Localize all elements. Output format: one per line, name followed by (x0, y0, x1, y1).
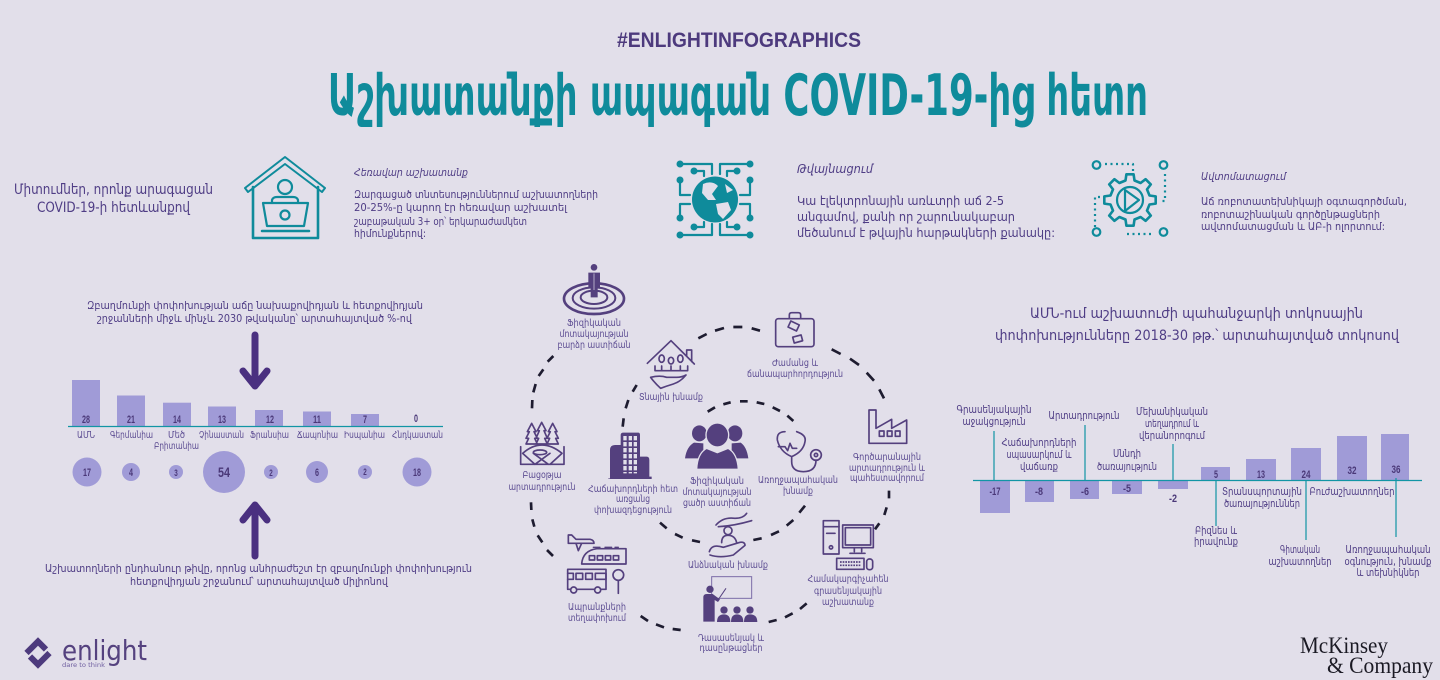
diverging bar chart: US labor demand (956, 404, 1432, 579)
logo: McKinsey & Company: & Company (1327, 653, 1433, 678)
text block: digitization: մեծանում է թվային հարթակների քանակը: (797, 225, 1055, 240)
text block: remote work: հիմունքներով: (354, 227, 426, 240)
diverging bar chart: US labor demand: Գրասենյակային (956, 404, 1032, 416)
text block: automation: ավտոմատացման և ԱԲ-ի ոլորտում: (1201, 220, 1385, 233)
bar chart: occupation change by country (68, 380, 443, 452)
bar chart: occupation change by country: 7 (363, 414, 367, 426)
diagram labels: Ֆիզիկական (690, 476, 744, 487)
diverging bar chart: US labor demand: սպասարկում և (1006, 449, 1072, 461)
circular work-arena diagram (508, 264, 925, 654)
bubble row: workers needing change, millions: 54 (218, 464, 230, 480)
diagram labels: Ապրանքների (568, 602, 626, 613)
text block: digitization: Կա էլեկտրոնային առևտրի աճ 2-5 (797, 193, 1004, 208)
diagram labels: գրասենյակային (814, 586, 882, 597)
icon: office building (608, 433, 652, 479)
icon: outdoor production (521, 422, 564, 464)
diagram labels: աշխատանք (822, 597, 874, 608)
diverging bar chart: US labor demand: -6 (1081, 486, 1089, 498)
diverging bar chart: US labor demand: 36 (1392, 464, 1400, 476)
diverging bar chart: US labor demand: 5 (1214, 469, 1218, 481)
text block: remote work (354, 166, 598, 240)
bubble row: workers needing change, millions: 17 (83, 467, 91, 479)
bar chart: occupation change by country: Մեծ (168, 430, 185, 441)
text block: remote work: 20-25%-ը կարող էր հեռավար աշխատել (354, 201, 568, 214)
diverging bar chart: US labor demand: Արտադրություն (1048, 410, 1120, 422)
bar chart: occupation change by country: Իսպանիա (344, 430, 385, 441)
diagram labels: Ֆիզիկական (567, 318, 621, 329)
diverging bar chart: US labor demand: Մեխանիկական (1136, 406, 1208, 418)
diverging bar chart: US labor demand: Հաճախորդների (1002, 437, 1076, 449)
bubble row: workers needing change, millions: 2 (269, 468, 273, 478)
diverging bar chart: US labor demand: 13 (1257, 469, 1265, 481)
diagram labels: ցածր աստիճան (683, 498, 751, 509)
trends heading: Միտումներ, որոնք արագացան (14, 182, 213, 198)
left chart caption: Աշխատողների ընդհանուր թիվը, որոնց անհրաժեշտ էր զբաղմունքի փոփոխություն (45, 562, 472, 575)
icon: stethoscope (777, 432, 821, 472)
diverging bar chart: US labor demand: -2 (1169, 493, 1177, 505)
diagram labels: ճանապարհորդություն (747, 369, 843, 380)
logo: McKinsey & Company (1300, 633, 1433, 678)
diagram labels: Հաճախորդների հետ (588, 484, 678, 495)
icon: automation gear (1093, 161, 1167, 236)
diagram labels: արտադրություն և (849, 463, 925, 474)
diverging bar chart: US labor demand: ծառայություններ (1224, 498, 1300, 510)
diverging bar chart: US labor demand: 32 (1348, 465, 1356, 477)
diverging bar chart: US labor demand: վերանորոգում (1139, 430, 1205, 442)
bubble row: workers needing change, millions (72, 451, 432, 493)
icon: classroom (703, 577, 757, 622)
hashtag: #ENLIGHTINFOGRAPHICS (617, 29, 861, 52)
diagram labels: փոխազդեցություն (594, 505, 672, 516)
text block: digitization: Թվայնացում (797, 161, 875, 176)
logo: enlight: enlight (62, 634, 147, 667)
bar chart: occupation change by country: 0 (414, 413, 418, 425)
bar chart: occupation change by country: Գերմանիա (110, 430, 153, 441)
icon: digital globe (676, 160, 754, 238)
right chart heading: փոփոխությունները 2018-30 թթ.՝ արտահայտված տոկոսով (995, 328, 1400, 344)
diagram labels: արտադրություն (508, 482, 576, 493)
diagram labels: Առողջապահական (758, 475, 838, 486)
bubble row: workers needing change, millions: 6 (315, 467, 319, 479)
icon: freight transport (568, 535, 626, 593)
bubble row: workers needing change, millions: 3 (174, 468, 178, 478)
diagram labels: Ժամանց և (772, 358, 818, 369)
diagram labels: մոտակայության (682, 487, 752, 498)
text block: automation: Ավտոմատացում (1201, 170, 1287, 183)
dashed arcs (531, 327, 889, 630)
logo: enlight (26, 634, 147, 669)
diverging bar chart: US labor demand: իրավունք (1194, 536, 1238, 548)
arrow: up to bubbles (243, 505, 267, 556)
bar chart: occupation change by country: Ֆրանսիա (250, 430, 289, 441)
diverging bar chart: US labor demand: -8 (1035, 486, 1043, 498)
diagram labels: մոտակայության (560, 329, 628, 340)
trends heading: COVID-19-ի հետևանքով (37, 200, 191, 216)
text block: remote work: շաբաթական 3+ օր՝ երկարաժամկետ (354, 215, 527, 228)
diverging bar chart: US labor demand: վաճառք (1020, 461, 1058, 473)
bar chart: occupation change by country: Ճապոնիա (297, 430, 338, 441)
diagram labels: Գործարանային (853, 452, 921, 463)
diverging bar chart: US labor demand: Բուժաշխատողներ (1310, 486, 1394, 498)
icon: factory (869, 410, 907, 443)
diagram labels: Տնային խնամք (639, 392, 703, 403)
icon: personal care (709, 513, 752, 557)
diverging bar chart: US labor demand: -17 (990, 486, 1000, 498)
text block: automation: Աճ ռոբոտատեխնիկայի օգտագործման, (1201, 195, 1407, 208)
bar chart: occupation change by country: 12 (266, 414, 274, 426)
left chart heading: Զբաղմունքի փոփոխության աճը նախաքովիդյան և հետքովիդյան (87, 299, 423, 312)
bar chart: occupation change by country: 28 (82, 414, 90, 426)
bubble row: workers needing change, millions: 4 (129, 467, 134, 479)
diverging bar chart: US labor demand: ծառայություն (1097, 461, 1157, 473)
icon: home care (647, 341, 694, 388)
diverging bar chart: US labor demand: -5 (1123, 483, 1131, 495)
logo: enlight: dare to think (62, 661, 105, 669)
bar chart: occupation change by country: 13 (218, 414, 226, 426)
diverging bar chart: US labor demand: Սննդի (1113, 448, 1141, 460)
bar chart: occupation change by country: Չինաստան (199, 430, 244, 441)
icon: home office (245, 157, 325, 238)
diverging bar chart: US labor demand: տեղադրում և (1145, 418, 1199, 430)
text block: automation (1201, 170, 1407, 233)
bar chart: occupation change by country: Բրիտանիա (154, 441, 199, 452)
left chart caption (45, 562, 472, 588)
diagram labels: Դասասենյակ և (698, 633, 764, 644)
diverging bar chart: US labor demand: աշխատողներ (1268, 556, 1332, 568)
trends heading (14, 182, 213, 216)
bubble row: workers needing change, millions: 18 (413, 467, 421, 479)
diverging bar chart: US labor demand: Տրանսպորտային (1222, 486, 1302, 498)
right chart heading: ԱՄՆ-ում աշխատուժի պահանջարկի տոկոսային (1030, 306, 1363, 322)
diagram labels: դասընթացներ (700, 643, 762, 654)
arrow: down to bar chart (243, 335, 267, 386)
logo: McKinsey & Company: McKinsey (1300, 633, 1388, 658)
diagram labels: տեղափոխում (568, 613, 627, 624)
bar chart: occupation change by country: ԱՄՆ (77, 430, 95, 441)
left chart heading: շրջանների միջև մինչև 2030 թվականը՝ արտահայտված %-ով (97, 312, 412, 325)
icon: people group (685, 423, 748, 469)
bar chart: occupation change by country: 21 (127, 414, 135, 426)
text block: remote work: Զարգացած տնտեսություններում աշխատողների (354, 188, 598, 201)
diverging bar chart: US labor demand: 24 (1302, 469, 1311, 481)
text block: automation: ռոբոտաշինական գործընթացների (1201, 208, 1380, 221)
diagram labels: Անձնական խնամք (688, 560, 768, 571)
diagram labels: Համակարգիչահեն (808, 574, 888, 585)
icon: computer (823, 521, 873, 570)
right chart heading (995, 306, 1400, 344)
icon: suitcase (776, 313, 814, 347)
bar chart: occupation change by country: 14 (173, 414, 182, 426)
diagram labels: բարձր աստիճան (558, 340, 630, 351)
diverging bar chart: US labor demand: Բիզնես և (1195, 525, 1238, 537)
bar chart: occupation change by country: 11 (313, 414, 321, 426)
left chart caption: հետքովիդյան շրջանում՝ արտահայտված միլիոնով (130, 575, 388, 588)
icon: person on target (564, 264, 624, 314)
left chart heading (87, 299, 423, 325)
diverging bar chart: US labor demand: Գիտական (1280, 544, 1320, 556)
diagram labels (508, 318, 925, 654)
diverging bar chart: US labor demand: և տեխնիկներ (1356, 567, 1420, 579)
diagram labels: խնամք (783, 486, 813, 497)
diverging bar chart: US labor demand: աջակցություն (962, 416, 1026, 428)
diagram labels: Բացօթյա (522, 470, 562, 481)
diagram labels: պահեստավորում (850, 473, 925, 484)
text block: digitization: անգամով, քանի որ շարունակաբար (797, 209, 1015, 224)
text block: digitization (797, 161, 1055, 240)
diagram labels: առցանց (616, 494, 650, 505)
bubble row: workers needing change, millions: 2 (363, 467, 367, 477)
text block: remote work: Հեռավար աշխատանք (354, 166, 468, 179)
bar chart: occupation change by country: Հնդկաստան (392, 430, 443, 441)
